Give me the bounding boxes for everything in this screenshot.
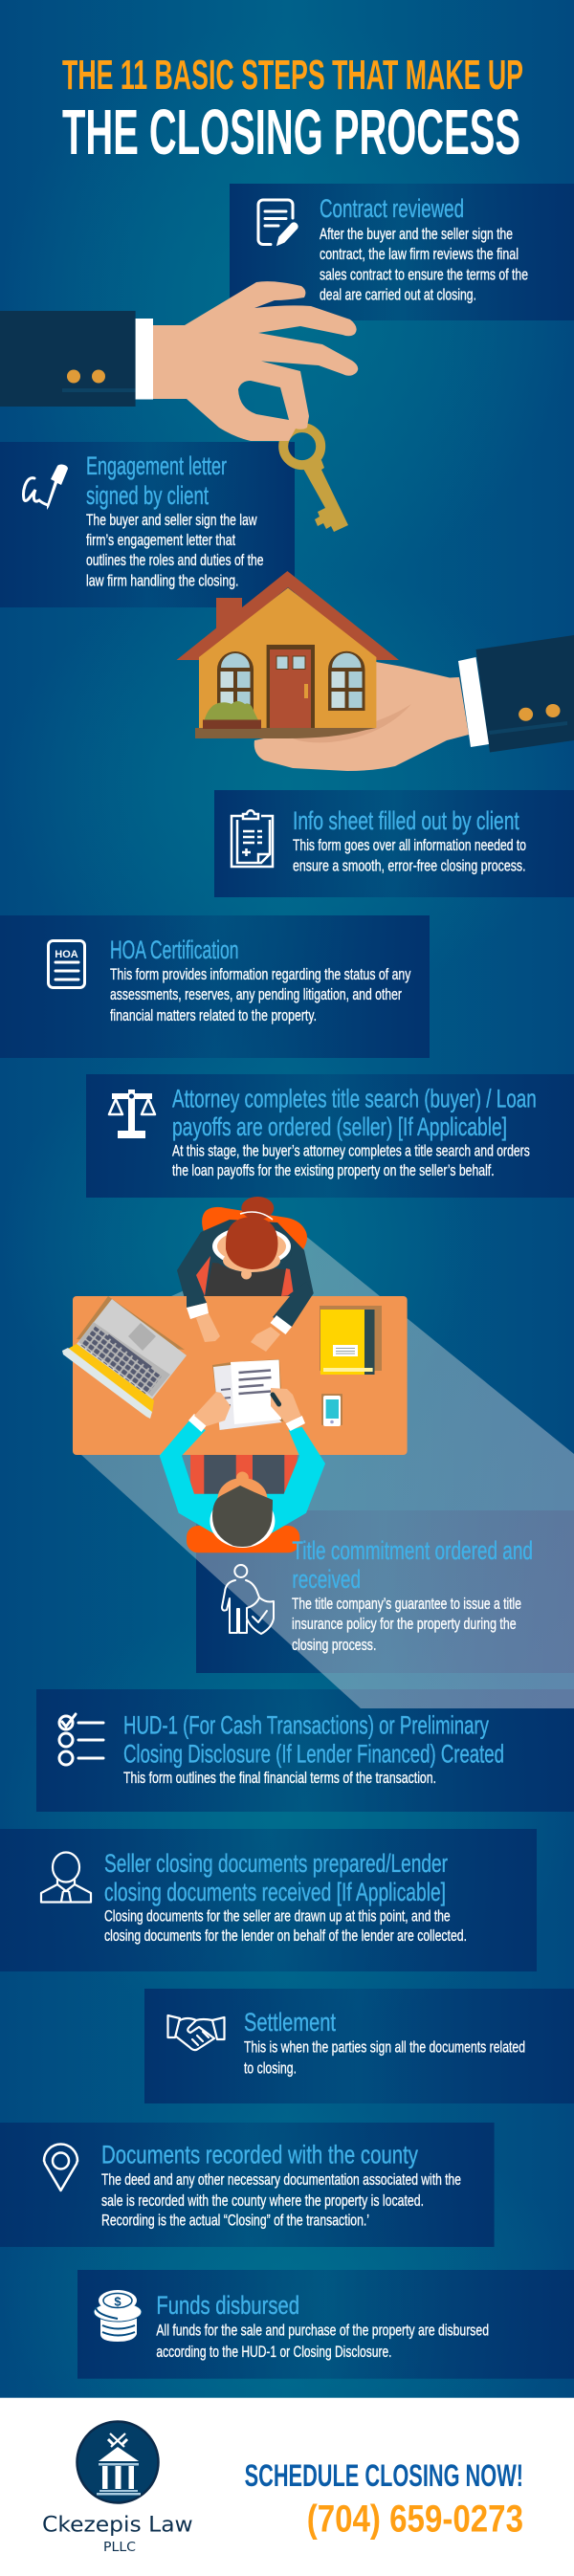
panel: documents recorded (0, 2123, 495, 2247)
logo (42, 2422, 193, 2555)
window (217, 651, 254, 711)
house (176, 571, 399, 738)
illustration: meeting at a table (62, 1197, 408, 1552)
woman's hair bun (241, 1197, 274, 1220)
body text: sale is recorded with the county where the property is located. (101, 2191, 424, 2210)
panel: funds disbursed (77, 2270, 574, 2379)
icon: coins: $ (114, 2294, 121, 2309)
icon: map pin (44, 2145, 77, 2191)
documents (212, 1359, 283, 1430)
heading: received (292, 1565, 361, 1594)
panel: engagement letter (0, 442, 295, 607)
window (328, 651, 365, 711)
body text (156, 2322, 489, 2361)
body text (86, 511, 264, 589)
body text (172, 1142, 530, 1179)
man's chair (187, 1526, 299, 1552)
shirt cuff (458, 657, 489, 747)
body text (293, 836, 526, 874)
icon: checklist (59, 1714, 103, 1765)
man (160, 1388, 325, 1548)
heading (104, 1849, 448, 1906)
shadow cast by the table scene (73, 1237, 574, 1708)
firm suffix: PLLC (103, 2541, 136, 2555)
body text: This form outlines the final financial terms of the transaction. (123, 1769, 436, 1787)
cuff button (92, 369, 105, 383)
woman's chair (202, 1207, 307, 1249)
icon: contract with pen (258, 200, 298, 245)
panel: seller closing documents (0, 1829, 537, 1971)
body text (110, 965, 411, 1024)
firm name: Ckezepis Law (42, 2514, 193, 2538)
body text: outlines the roles and duties of the (86, 551, 264, 569)
chimney (216, 598, 242, 636)
cuff button (545, 704, 561, 717)
panel: HOA certification (0, 915, 430, 1058)
body text: law firm handling the closing. (86, 572, 239, 589)
heading (123, 1711, 504, 1769)
body text (320, 225, 528, 304)
icon: clipboard (232, 810, 273, 867)
walls (199, 587, 376, 728)
cuff button (519, 708, 533, 721)
phone number: (704) 659-0273 (307, 2499, 523, 2541)
body text: The buyer and seller sign the law (86, 511, 257, 529)
palm crease (287, 704, 411, 742)
sleeve trim (62, 388, 136, 392)
heading (172, 1085, 537, 1141)
woman (177, 1212, 314, 1327)
panel: info sheet (214, 790, 574, 897)
sleeve (0, 311, 136, 407)
heading: Settlement (244, 2008, 336, 2037)
ground (195, 728, 376, 738)
body text (104, 1907, 467, 1945)
panel: title commitment content (222, 1536, 533, 1654)
shirt cuff (136, 319, 153, 400)
body text: This form provides information regarding the status of any (110, 965, 411, 983)
sleeve trim (489, 721, 567, 735)
heading (86, 451, 227, 510)
body text: firm’s engagement letter that (86, 531, 235, 549)
icon: signature and pen (24, 465, 68, 510)
heading: Documents recorded with the county (101, 2141, 418, 2169)
hand (153, 281, 358, 441)
table (73, 1296, 408, 1455)
door (267, 645, 315, 728)
body text (244, 2038, 525, 2078)
icon: person in suit (41, 1852, 91, 1902)
body text: Closing documents for the seller are drawn up at this point, and the (104, 1907, 451, 1926)
body text: to closing. (244, 2059, 297, 2078)
panel: contract reviewed (230, 184, 574, 320)
heading: Contract reviewed (320, 194, 464, 223)
planter (203, 719, 261, 729)
illustration: hand holding key (0, 281, 358, 441)
woman's arms over the table (187, 1282, 314, 1352)
body text: financial matters related to the property. (110, 1006, 317, 1024)
palm (254, 662, 469, 771)
icon: scales (109, 1090, 155, 1138)
illustration: key (283, 428, 348, 532)
icon: HOA document (48, 941, 84, 987)
panel: HUD-1 (36, 1689, 574, 1812)
heading: HOA Certification (110, 936, 239, 964)
heading: Engagement letter (86, 451, 227, 480)
heading: Funds disbursed (156, 2291, 299, 2320)
icon: handshake (168, 2015, 224, 2050)
book (320, 1306, 382, 1375)
illustration: hand holding house (176, 571, 574, 771)
sleeve (476, 635, 574, 752)
laptop (62, 1296, 187, 1419)
body text (292, 1595, 521, 1654)
heading: closing documents received [If Applicable] (104, 1878, 446, 1906)
icon: coins (94, 2290, 142, 2342)
logo badge (77, 2422, 159, 2502)
title (62, 52, 523, 168)
icon: person with shield (222, 1565, 274, 1634)
heading (292, 1536, 533, 1594)
body text: Recording is the actual “Closing” of the transaction.’ (101, 2212, 369, 2230)
footer (0, 2398, 574, 2576)
panel: attorney title search (86, 1074, 574, 1198)
body text: according to the HUD-1 or Closing Disclosure. (156, 2343, 392, 2361)
panel: title commitment background (196, 1510, 574, 1673)
heading: signed by client (86, 481, 209, 510)
body text: assessments, reserves, any pending litigation, and other (110, 985, 402, 1003)
roof (176, 571, 399, 660)
phone (321, 1394, 342, 1426)
icon: HOA document: HOA (55, 949, 78, 960)
body text (101, 2170, 461, 2230)
panel: settlement (144, 1989, 574, 2103)
body text: closing process. (292, 1636, 376, 1654)
body text: deal are carried out at closing. (320, 285, 476, 304)
cuff button (67, 369, 80, 383)
bush (205, 701, 258, 720)
